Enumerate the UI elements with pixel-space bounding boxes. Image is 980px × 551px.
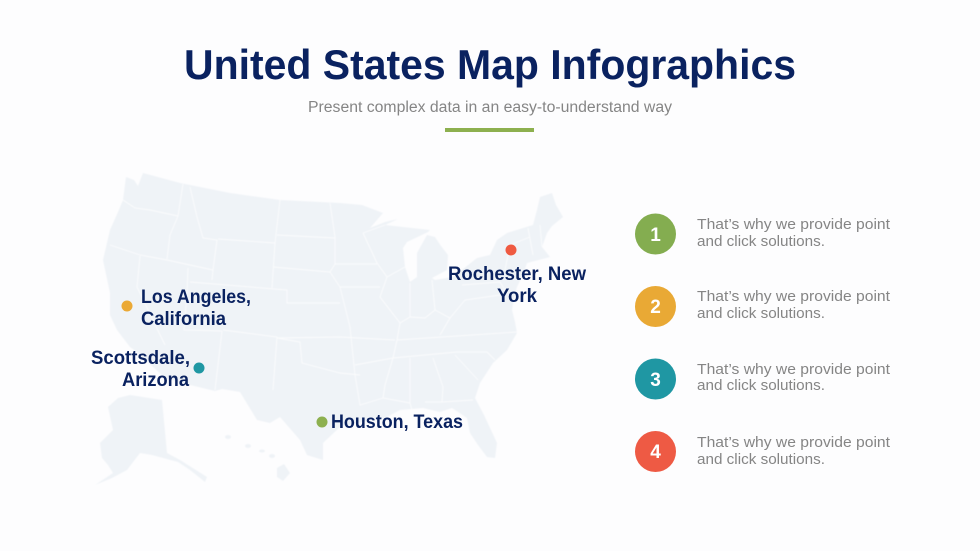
badge 3: 3 <box>650 370 661 391</box>
marker: Scottsdale <box>194 362 204 374</box>
marker: Rochester <box>506 244 516 256</box>
title: United States Map Infographics <box>184 41 796 88</box>
marker: Los Angeles <box>122 300 132 312</box>
map: Hawaii <box>225 435 290 481</box>
description 1: That’s why we provide point <box>697 216 891 233</box>
description 2 <box>697 288 891 322</box>
label: Rochester: York <box>497 286 537 307</box>
description 3: That’s why we provide point <box>697 361 891 378</box>
map: contiguous states <box>103 173 563 460</box>
badge 1: 1 <box>650 225 661 246</box>
legend item 1 <box>635 214 891 254</box>
description 4 <box>697 434 891 468</box>
legend item 4 <box>635 431 891 472</box>
description 1: and click solutions. <box>697 233 825 250</box>
badge 4: 4 <box>650 442 661 463</box>
subtitle: Present complex data in an easy-to-understand way <box>308 99 672 116</box>
label: Los Angeles: California <box>141 309 226 330</box>
description 4: That’s why we provide point <box>697 434 891 451</box>
map: state borders <box>110 184 542 410</box>
title underline <box>445 128 534 132</box>
legend item 3 <box>635 358 891 400</box>
description 3 <box>697 361 891 394</box>
badge 3 <box>635 358 676 400</box>
description 4: and click solutions. <box>697 451 825 468</box>
description 2: That’s why we provide point <box>697 288 891 305</box>
description 2: and click solutions. <box>697 305 825 322</box>
label: Houston: Houston, Texas <box>331 412 463 433</box>
label: Scottsdale <box>91 348 190 391</box>
badge 4 <box>635 431 676 472</box>
description 1 <box>697 216 891 250</box>
label: Rochester: Rochester, New <box>448 264 586 285</box>
map: United States <box>95 173 563 485</box>
legend item 2 <box>635 286 891 327</box>
badge 1 <box>635 214 676 254</box>
label: Scottsdale: Arizona <box>122 370 189 391</box>
badge 2 <box>635 286 676 327</box>
marker: Houston <box>316 416 328 428</box>
label: Los Angeles <box>141 287 251 330</box>
label: Los Angeles: Los Angeles, <box>141 287 251 308</box>
description 3: and click solutions. <box>697 377 825 394</box>
label: Scottsdale: Scottsdale, <box>91 348 190 369</box>
label: Rochester <box>448 264 586 307</box>
map: Alaska <box>95 395 207 485</box>
badge 2: 2 <box>650 297 661 318</box>
